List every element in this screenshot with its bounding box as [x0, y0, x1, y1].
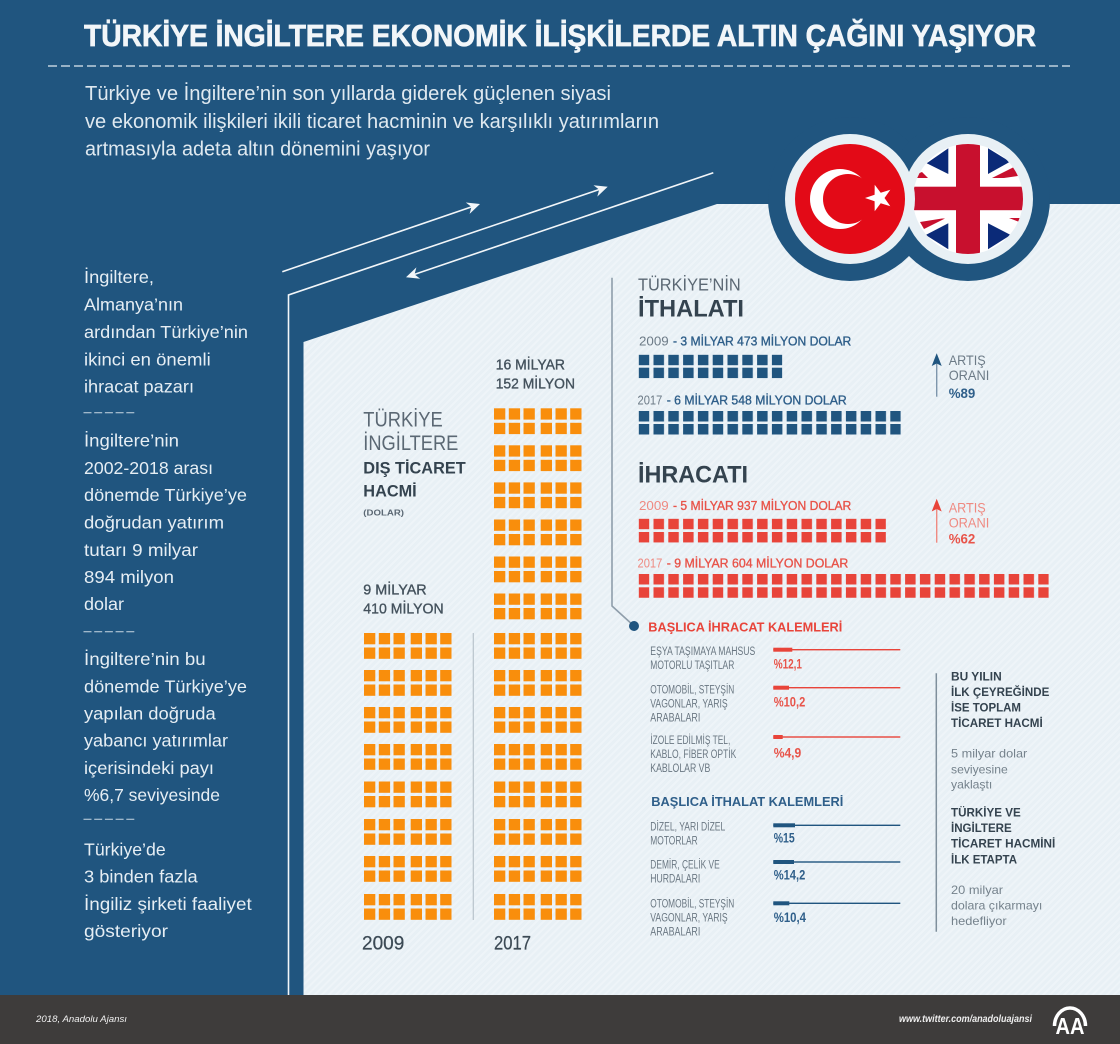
import item 2: DEMİR, ÇELİK VE — [650, 859, 720, 872]
import item 1: DİZEL, YARI DİZEL — [650, 821, 726, 834]
import item 1: %15 — [774, 829, 795, 845]
import item 3: OTOMOBİL, STEYŞİN — [650, 897, 734, 910]
text block: first quarter trade volume: TİCARET HACMİ — [951, 715, 1043, 730]
text block: left column facts — [84, 267, 252, 941]
heading: main import items: BAŞLICA İTHALAT KALEMLERİ — [651, 794, 843, 809]
text block: trade volume target: TÜRKİYE VE — [951, 805, 1021, 820]
import item 1: MOTORLAR — [650, 836, 698, 848]
text block: first quarter trade volume: BU YILIN — [951, 670, 1002, 684]
fact: export market: ikinci en önemli — [84, 350, 211, 370]
imports 2017 label: - 6 MİLYAR 548 MİLYON DOLAR — [667, 393, 847, 407]
text block: first quarter trade volume: İLK ÇEYREĞİNDE — [951, 684, 1049, 699]
footer bar — [0, 995, 1120, 1044]
icon: UK flag — [903, 134, 1033, 264]
arrows: trade flow lines — [282, 173, 713, 995]
icon: flags badge — [768, 134, 1050, 281]
bar: imports 2017 squares — [639, 411, 901, 434]
import item 3: VAGONLAR, YARIŞ — [650, 912, 728, 924]
label: 2009 total: 9 MİLYAR — [363, 581, 427, 599]
heading: foreign trade volume — [363, 409, 466, 518]
text block: first quarter trade volume: yaklaştı — [951, 778, 992, 792]
fact: export market: ardından Türkiye’nin — [84, 322, 248, 342]
fact: share of investment: dönemde Türkiye’ye — [84, 676, 247, 696]
text block: trade volume target: hedefliyor — [951, 914, 1007, 928]
callout: imports growth rate — [932, 352, 989, 401]
icon: AA logo: AA — [1056, 1013, 1084, 1039]
export item 2 — [650, 683, 900, 724]
text block: first quarter trade volume — [951, 670, 1049, 792]
heading: foreign trade volume: DIŞ TİCARET — [363, 458, 466, 477]
connector line with dot — [612, 278, 639, 631]
intro text block: artmasıyla adeta altın dönemini yaşıyor — [85, 138, 430, 160]
axis labels: years: 2017 — [494, 933, 531, 954]
fact: share of investment: %6,7 seviyesinde — [84, 785, 220, 805]
fact: share of investment: İngiltere’nin bu — [84, 649, 206, 669]
import item 2: %14,2 — [774, 866, 805, 882]
heading: imports — [638, 275, 744, 323]
exports 2017 label: 2017 — [638, 556, 662, 570]
fact: direct investment: dolar — [84, 594, 124, 614]
callout: imports growth rate: ORANI — [949, 367, 989, 383]
text block: first quarter trade volume: seviyesine — [951, 762, 1008, 776]
heading: foreign trade volume: İNGİLTERE — [363, 432, 458, 455]
callout: exports growth rate: %62 — [949, 530, 975, 546]
fact: export market — [84, 267, 248, 397]
heading: main export items: BAŞLICA İHRACAT KALEMLERİ — [648, 620, 842, 635]
callout: exports growth rate — [932, 499, 989, 546]
fact: British companies: İngiliz şirketi faaliyet — [84, 894, 252, 914]
fact: British companies: Türkiye’de — [84, 840, 166, 860]
export item 3: KABLOLAR VB — [650, 763, 711, 775]
label: 2017 total: 152 MİLYON — [496, 374, 575, 392]
heading: imports: İTHALATI — [638, 296, 744, 323]
bar: exports 2017 squares — [639, 574, 1049, 598]
footer twitter link: www.twitter.com/anadoluajansi — [899, 1014, 1032, 1025]
export item 3: KABLO, FİBER OPTİK — [650, 748, 737, 761]
callout: imports growth rate: %89 — [949, 385, 975, 401]
imports 2009 label: 2009 — [639, 335, 669, 349]
text block: trade volume target: 20 milyar — [951, 883, 1003, 897]
arrow: upper right-pointing — [282, 202, 480, 272]
fact: direct investment: doğrudan yatırım — [84, 513, 224, 533]
import item 1 — [650, 821, 900, 848]
exports 2009 label: - 5 MİLYAR 937 MİLYON DOLAR — [673, 499, 851, 513]
heading: foreign trade volume: HACMİ — [363, 482, 417, 501]
fact: export market: ihracat pazarı — [84, 377, 194, 397]
export item 1: MOTORLU TAŞITLAR — [650, 660, 734, 672]
fact: direct investment: tutarı 9 milyar — [84, 540, 198, 560]
text block: trade volume target: İLK ETAPTA — [951, 851, 1017, 866]
chart: 2009 orange blocks — [364, 633, 452, 920]
import item 3: %10,4 — [774, 909, 806, 925]
import item 2 — [650, 859, 900, 886]
export item 2: %10,2 — [774, 694, 805, 710]
intro text block — [85, 82, 659, 160]
label: 2009 total: 410 MİLYON — [363, 599, 444, 617]
icon: Turkish flag — [785, 134, 915, 264]
import item 3 — [650, 897, 900, 938]
exports 2017 label: - 9 MİLYAR 604 MİLYON DOLAR — [667, 556, 848, 570]
export item 1: EŞYA TAŞIMAYA MAHSUS — [650, 646, 756, 658]
fact: direct investment: dönemde Türkiye’ye — [84, 485, 247, 505]
fact: British companies — [84, 840, 252, 941]
export item 1 — [650, 646, 900, 672]
label: 2017 total — [496, 355, 575, 392]
bar: exports 2009 squares — [639, 519, 886, 543]
heading: imports: TÜRKİYE’NİN — [638, 275, 741, 295]
arrow: imports up — [932, 353, 942, 397]
imports 2009 label: - 3 MİLYAR 473 MİLYON DOLAR — [673, 335, 851, 349]
export item 2: OTOMOBİL, STEYŞİN — [650, 683, 734, 696]
fact: direct investment: İngiltere’nin — [84, 431, 179, 451]
export item 1: %12,1 — [774, 656, 802, 672]
label: 2009 total — [363, 581, 444, 617]
footer credit: 2018, Anadolu Ajansı — [35, 1014, 127, 1025]
text block: first quarter trade volume: İSE TOPLAM — [951, 700, 1021, 715]
fact: export market: Almanya’nın — [84, 295, 183, 315]
fact: British companies: 3 binden fazla — [84, 867, 198, 887]
export item 3 — [650, 734, 900, 775]
import item 2: HURDALARI — [650, 874, 700, 886]
axis labels: years — [362, 933, 531, 954]
text block: trade volume target: dolara çıkarmayı — [951, 899, 1042, 913]
text block: first quarter trade volume: 5 milyar dolar — [951, 747, 1027, 761]
heading: exports: İHRACATI — [638, 462, 748, 489]
title: TÜRKİYE İNGİLTERE EKONOMİK İLİŞKİLERDE ALTIN ÇAĞINI YAŞIYOR — [84, 18, 1036, 53]
callout: exports growth rate: ORANI — [949, 514, 989, 530]
text block: trade volume target: İNGİLTERE — [951, 820, 1012, 835]
heading: foreign trade volume: TÜRKİYE — [363, 409, 443, 432]
text block: trade volume target: TİCARET HACMİNİ — [951, 836, 1055, 851]
imports 2017 label: 2017 — [638, 393, 662, 407]
arrow: exports up — [932, 499, 942, 543]
chart: 2017 orange blocks — [494, 408, 582, 920]
bar: imports 2009 squares — [639, 355, 782, 378]
fact: British companies: gösteriyor — [84, 921, 168, 941]
export item 2: ARABALARI — [650, 712, 700, 724]
callout: imports growth rate: ARTIŞ — [949, 352, 986, 368]
fact: share of investment: yabancı yatırımlar — [84, 731, 228, 751]
panel: light content area — [304, 204, 1120, 995]
callout: exports growth rate: ARTIŞ — [949, 499, 986, 515]
arrow: left-pointing — [406, 173, 713, 279]
fact: export market: İngiltere, — [84, 267, 154, 287]
intro text block: Türkiye ve İngiltere’nin son yıllarda giderek güçlenen siyasi — [85, 82, 611, 105]
axis labels: years: 2009 — [362, 933, 404, 954]
text block: trade volume target — [951, 805, 1055, 928]
fact: share of investment: yapılan doğruda — [84, 703, 216, 723]
export item 3: %4,9 — [774, 744, 801, 760]
fact: direct investment: 894 milyon — [84, 567, 174, 587]
label: 2017 total: 16 MİLYAR — [496, 355, 565, 373]
heading: foreign trade volume: (DOLAR) — [363, 508, 404, 518]
fact: share of investment: içerisindeki payı — [84, 758, 214, 778]
exports 2009 label: 2009 — [639, 499, 669, 513]
fact: direct investment — [84, 431, 247, 614]
fact: direct investment: 2002-2018 arası — [84, 458, 213, 478]
export item 2: VAGONLAR, YARIŞ — [650, 698, 728, 710]
arrow: frame line with right-pointing head — [288, 185, 608, 995]
intro text block: ve ekonomik ilişkileri ikili ticaret hacminin ve karşılıklı yatırımların — [85, 111, 659, 133]
fact: share of investment — [84, 649, 247, 805]
import item 3: ARABALARI — [650, 926, 700, 938]
export item 3: İZOLE EDİLMİŞ TEL, — [650, 734, 730, 747]
